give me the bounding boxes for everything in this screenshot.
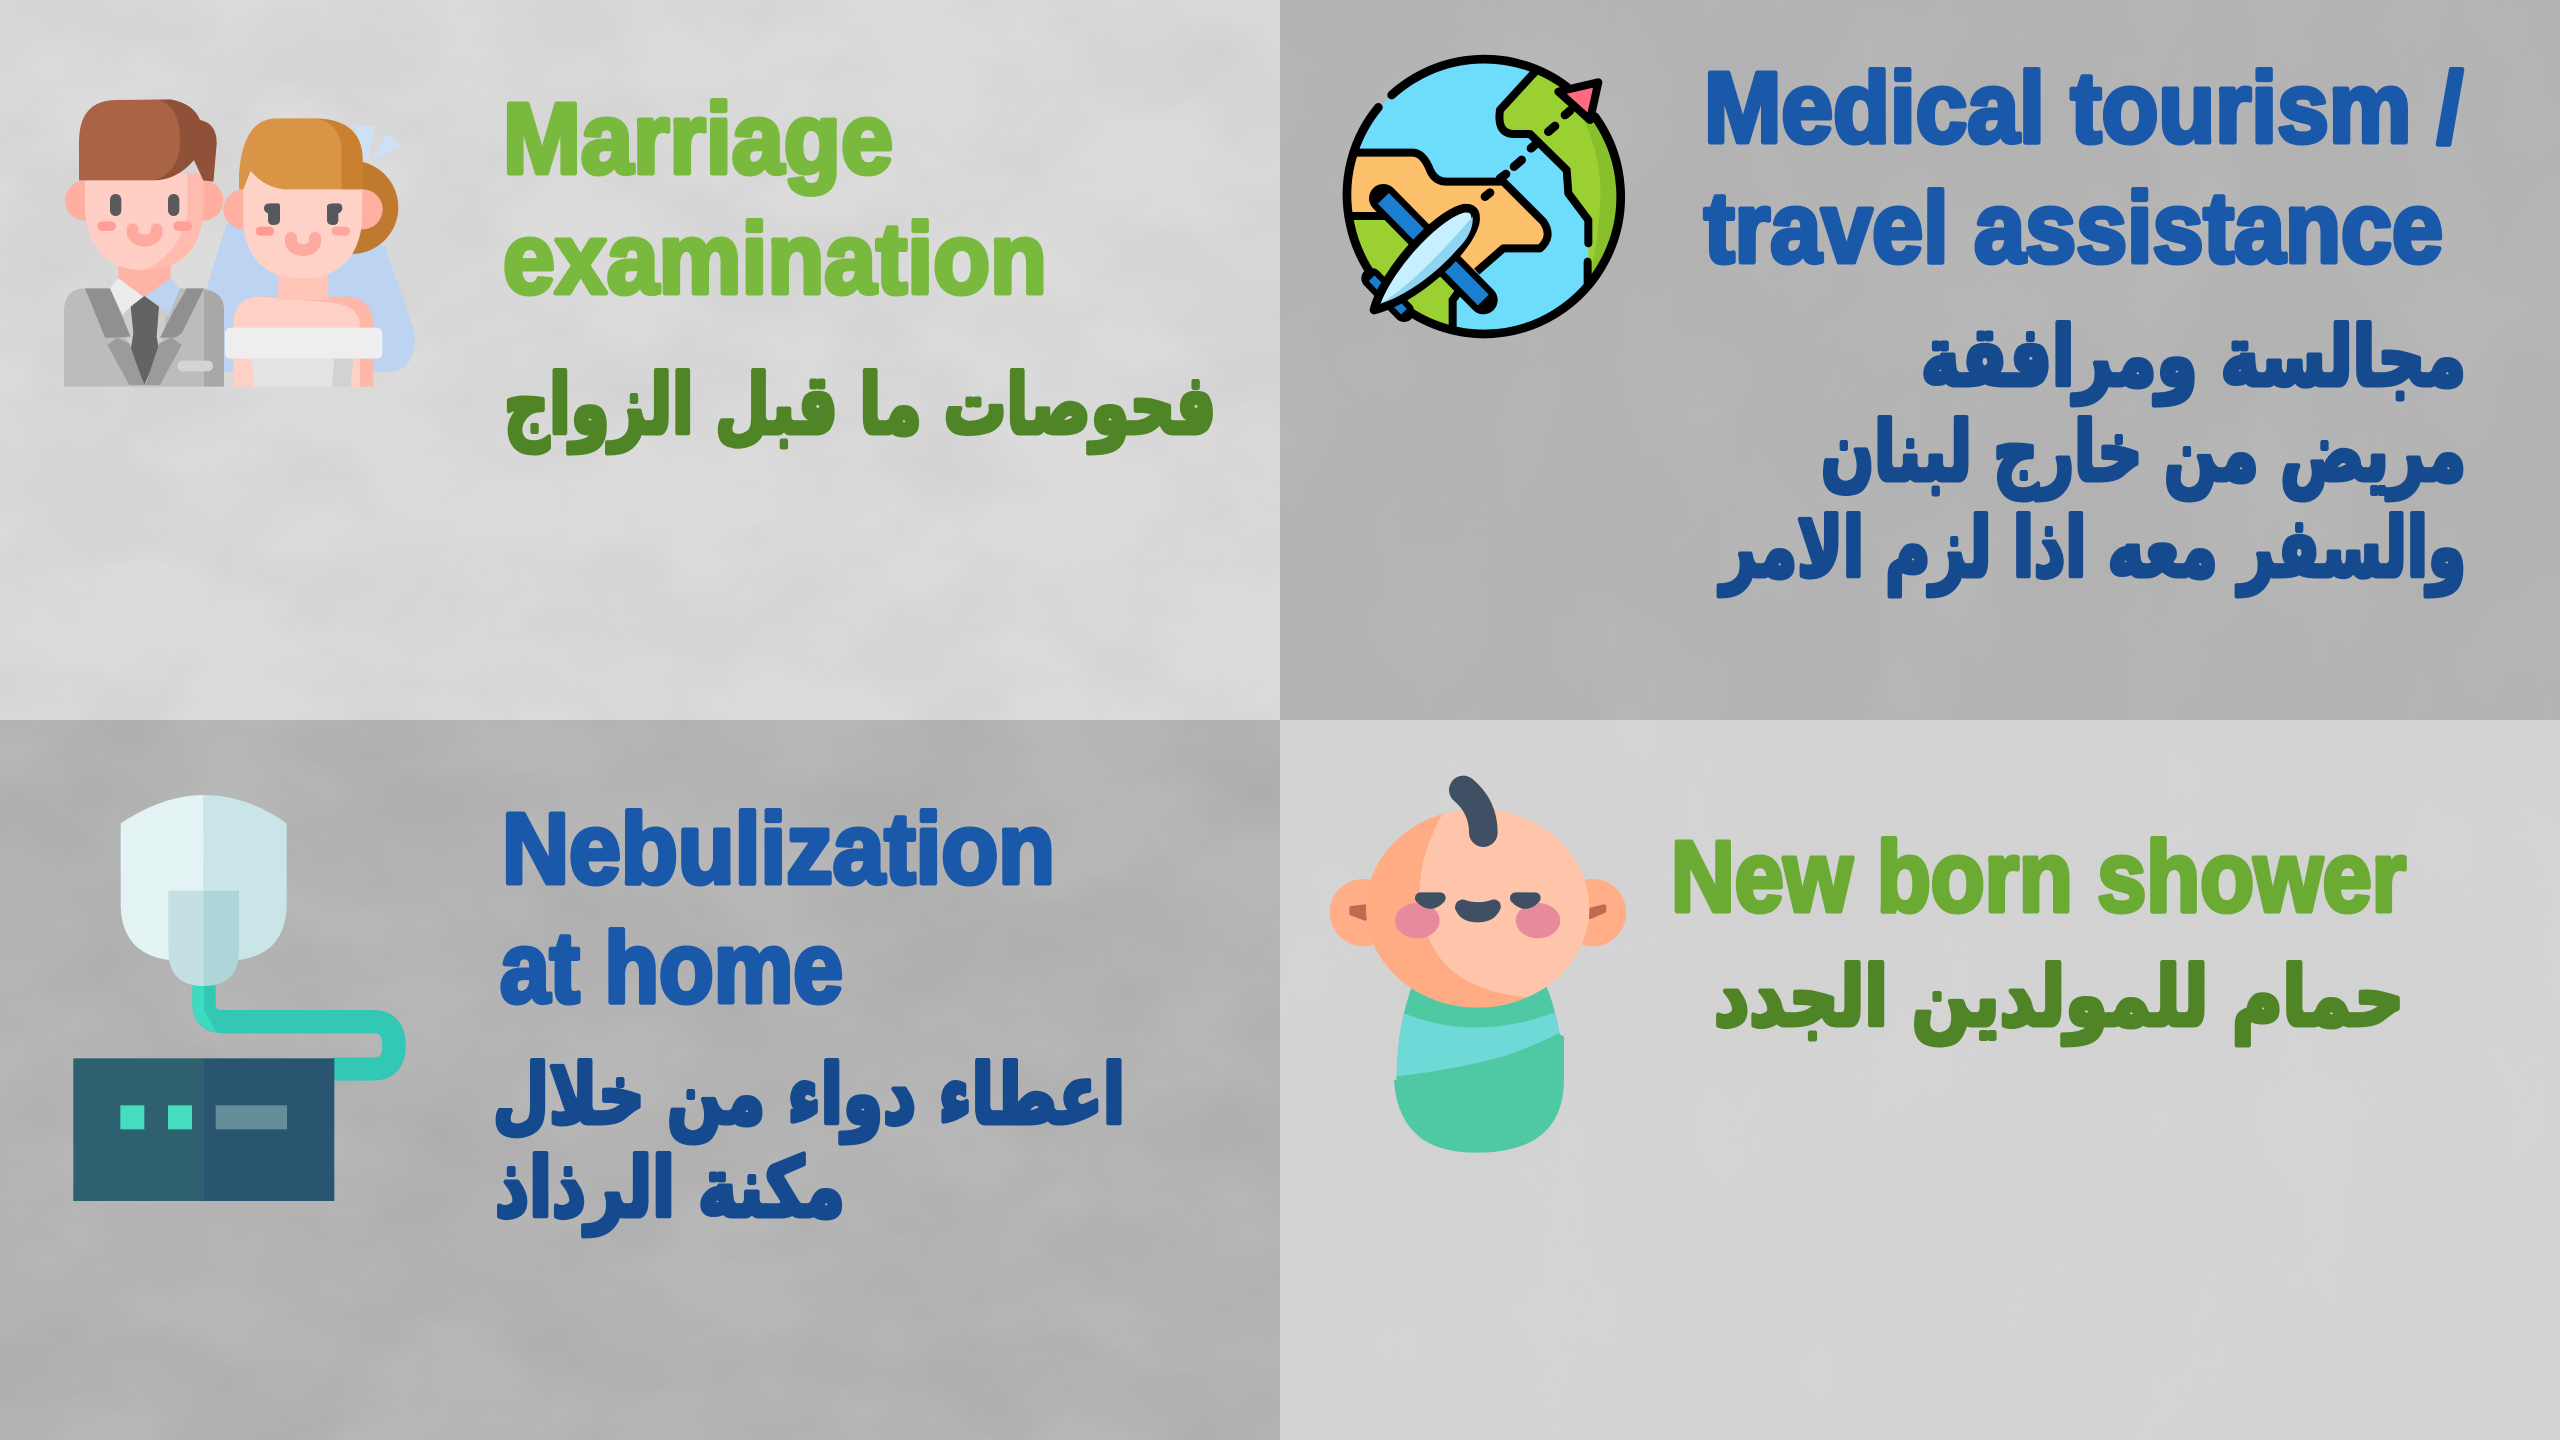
panel background: light concrete [0, 0, 1280, 720]
heading: Nebulization at home: Nebulization [502, 793, 1055, 905]
heading: Marriage examination [503, 83, 1047, 315]
heading: Nebulization at home [500, 793, 1055, 1024]
arabic text: giving medicine via nebulizer: مكنة الرذاذ [495, 1141, 845, 1236]
icon: globe with airplane [1340, 53, 1633, 340]
arabic text: giving medicine via nebulizer [493, 1048, 1125, 1236]
heading: Medical tourism / travel assistance: Medical tourism / [1704, 52, 2463, 164]
panel background: dark concrete [1280, 0, 2560, 720]
panel background: light concrete [1280, 720, 2560, 1440]
heading: New born shower: New born shower [1671, 821, 2406, 933]
icon: nebulizer machine with mask [73, 795, 394, 1201]
panel background: dark concrete [0, 720, 1280, 1440]
panel: medical tourism [1280, 0, 2560, 720]
arabic text: giving medicine via nebulizer: اعطاء دواء من خلال [493, 1048, 1125, 1144]
arabic text: patient accompaniment [1718, 310, 2466, 597]
heading: Medical tourism / travel assistance: travel assistance [1704, 172, 2443, 284]
panel: new born shower [1280, 720, 2560, 1440]
heading: Marriage examination: examination [503, 203, 1047, 315]
heading: Marriage examination: Marriage [503, 83, 893, 195]
panel: marriage examination [0, 0, 1280, 720]
heading: Nebulization at home: at home [500, 912, 843, 1024]
panel: nebulization [0, 720, 1280, 1440]
arabic text: newborn bath: حمام للمولدين الجدد [1714, 950, 2404, 1045]
arabic text: premarital checks: فحوصات ما قبل الزواج [504, 358, 1216, 454]
icon: bride and groom [64, 99, 415, 387]
icon: swaddled baby [1330, 790, 1626, 1157]
heading: Medical tourism / travel assistance [1704, 52, 2463, 284]
